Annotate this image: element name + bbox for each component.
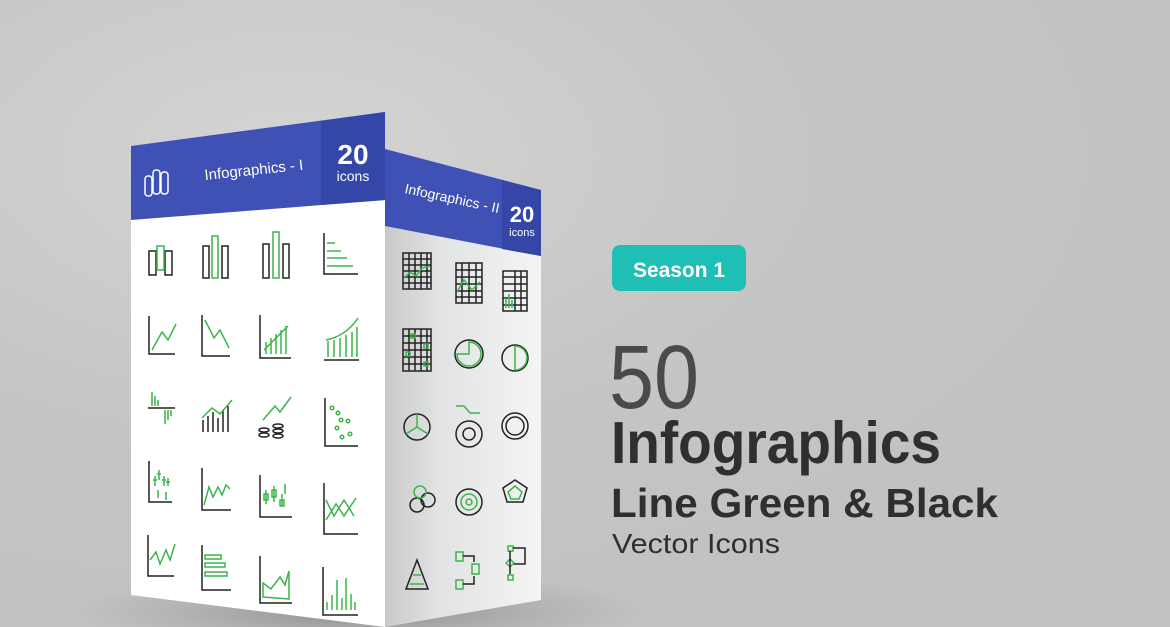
left icon grid — [148, 232, 359, 615]
tagline: Vector Icons — [612, 528, 780, 559]
subheading: Line Green & Black — [611, 480, 998, 526]
badge 20 icons right: icons — [509, 227, 535, 239]
number 50: 50 — [609, 328, 699, 428]
left header band — [131, 112, 385, 220]
heading Infographics: Infographics — [611, 410, 941, 476]
badge: Season 1 — [612, 245, 746, 291]
right icon grid — [403, 253, 528, 589]
panel: left face — [131, 112, 385, 627]
badge 20 icons right: 20 — [510, 202, 534, 227]
badge 20 icons: icons — [337, 168, 369, 184]
title block — [609, 328, 998, 559]
header title left: Infographics - I — [204, 157, 304, 184]
right header band — [385, 149, 541, 256]
panel: right face — [385, 149, 541, 627]
icon: cylinders — [145, 170, 168, 196]
badge 20 icons — [337, 139, 369, 184]
box shadow — [70, 570, 650, 627]
badge: Season 1: Season 1 — [633, 259, 725, 282]
badge 20 icons right — [509, 202, 535, 239]
badge 20 icons: 20 — [337, 139, 369, 170]
header title right: Infographics - II — [403, 180, 501, 216]
